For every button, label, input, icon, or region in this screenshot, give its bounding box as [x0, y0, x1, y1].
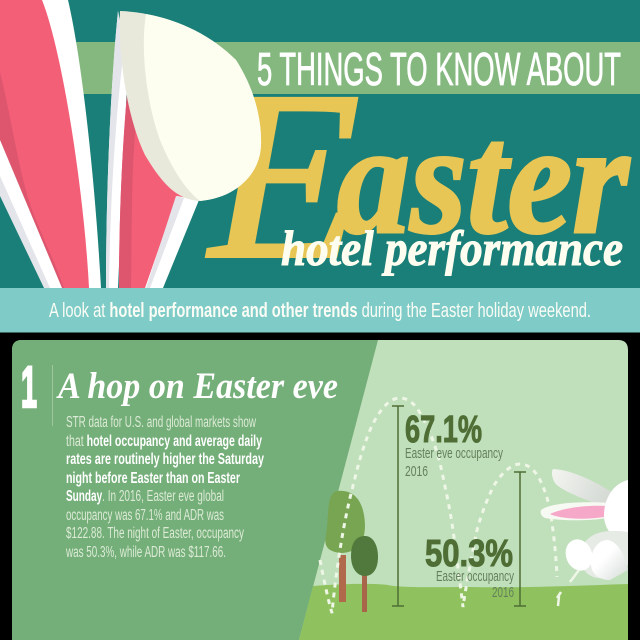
- body text: $122.88. The night of Easter, occupancy: [66, 525, 244, 542]
- icon: bunny: [541, 469, 628, 606]
- stat: 67.1%: 67.1%: [405, 409, 482, 451]
- stat label: Easter occupancy 2016: [436, 568, 514, 601]
- panel: left dark green section: [12, 340, 378, 640]
- stat label: Easter eve occupancy 2016: 2016: [405, 463, 428, 480]
- body text: [65, 414, 264, 561]
- icon: left bunny ear: [0, 0, 101, 288]
- header background: [0, 0, 640, 288]
- stat: 50.3%: 50.3%: [425, 533, 513, 575]
- stat label: Easter eve occupancy 2016: Easter eve occupancy: [405, 445, 503, 462]
- stat: 50.3%: [425, 533, 514, 601]
- body text: occupancy was 67.1% and ADR was: [66, 507, 224, 524]
- stat label: Easter occupancy 2016: 2016: [492, 584, 514, 601]
- body text: STR data for U.S. and global markets show: [66, 414, 257, 431]
- number divider: [52, 365, 53, 426]
- heading: Easter: E: [207, 42, 360, 308]
- body text: that hotel occupancy and average daily: [66, 433, 262, 450]
- ground: [299, 584, 628, 640]
- title ribbon: [0, 42, 640, 94]
- body text: was 50.3%, while ADR was $117.66.: [65, 544, 226, 561]
- body text: rates are routinely higher the Saturday: [66, 451, 264, 468]
- stat label: Easter eve occupancy 2016: [405, 445, 503, 480]
- panel: a hop on Easter eve: 1: [21, 355, 37, 420]
- bounce path: [320, 398, 557, 613]
- bar: Easter eve height: [392, 406, 404, 606]
- subtitle band: [0, 288, 640, 332]
- body text: night before Easter than on Easter: [66, 470, 240, 487]
- body text: Sunday. In 2016, Easter eve global: [66, 488, 224, 505]
- bar: Easter height: [514, 472, 526, 606]
- panel: a hop on Easter eve: [12, 340, 628, 640]
- stat: 67.1%: [405, 409, 503, 480]
- stat label: Easter occupancy 2016: Easter occupancy: [436, 568, 514, 585]
- section heading: A hop on Easter eve: [56, 366, 338, 407]
- icon: trees: [325, 491, 378, 612]
- heading: Easter: [207, 42, 630, 308]
- icon: right bunny ear: [106, 11, 261, 288]
